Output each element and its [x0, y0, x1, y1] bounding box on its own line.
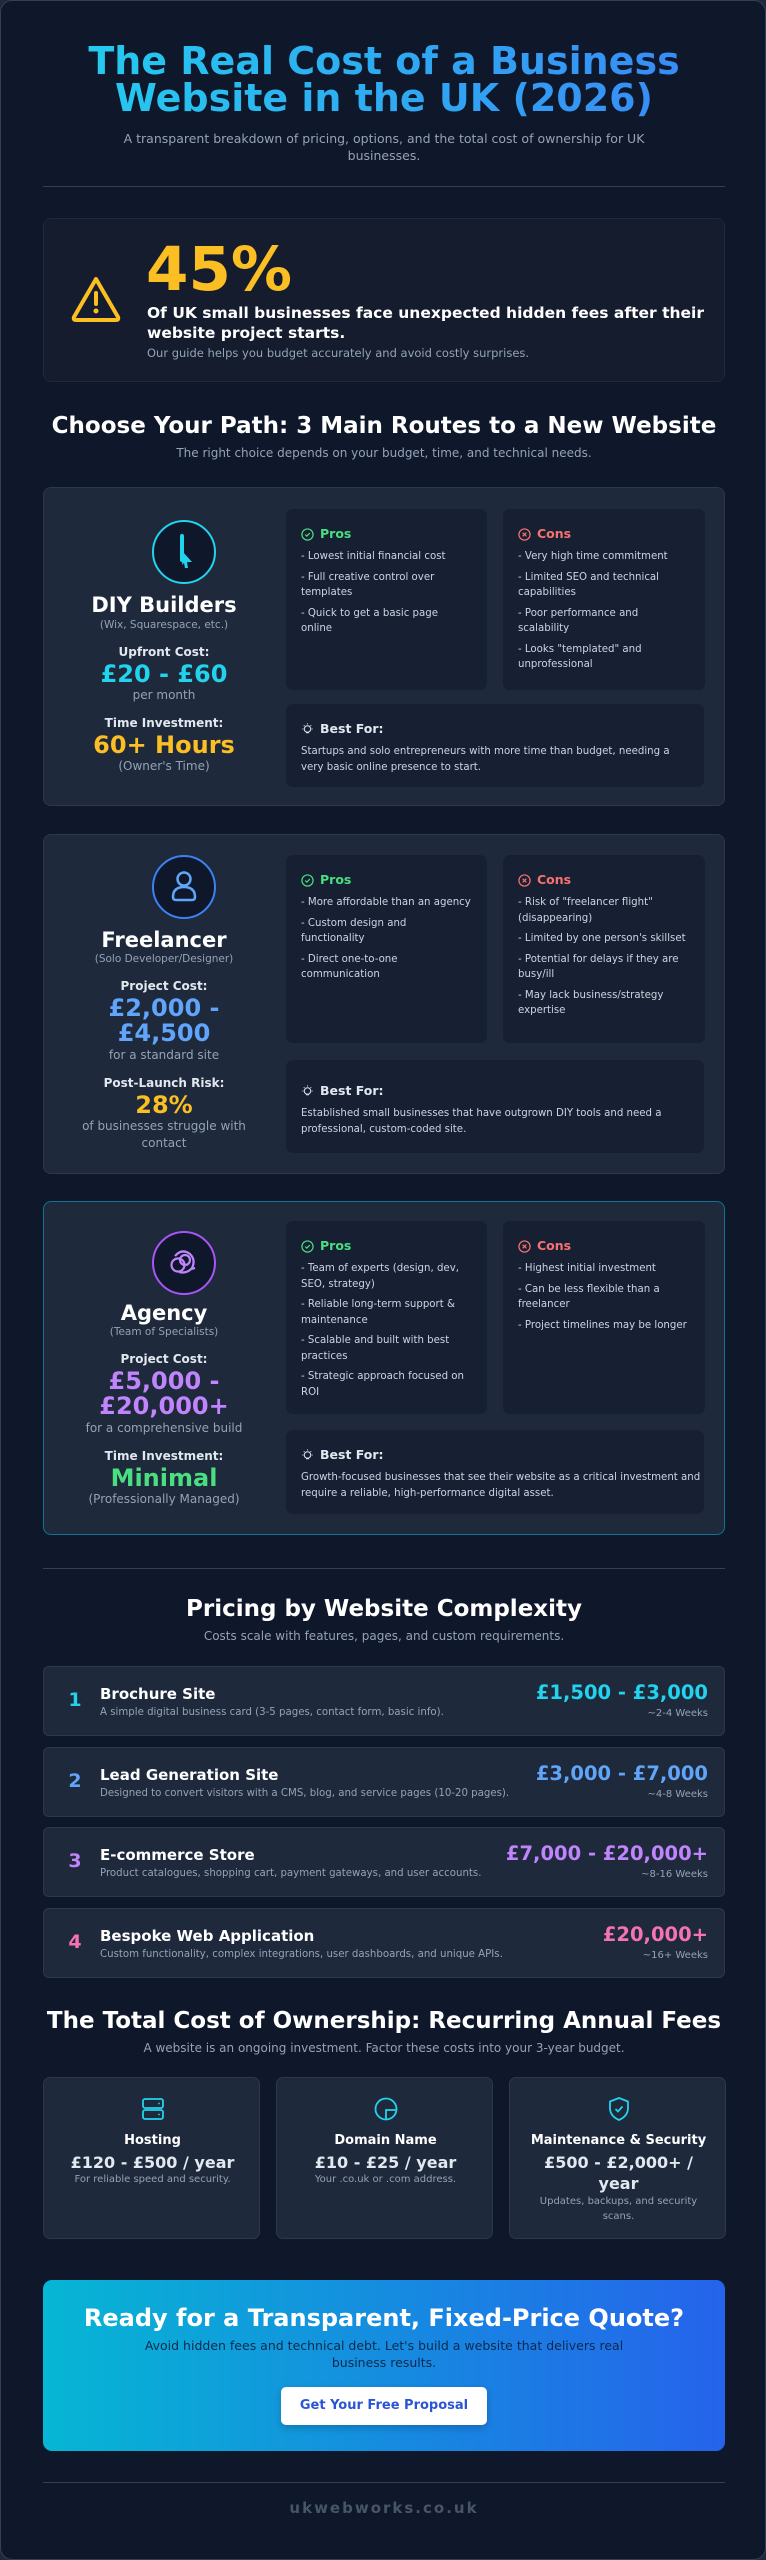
best for: Startups and solo entrepreneurs with more time than budget, needing a very basic online presence to start. — [301, 746, 670, 772]
best for: Best For: — [320, 1083, 384, 1098]
card: maintenance: £500 - £2,000+ / year — [544, 2153, 693, 2193]
cons: - Risk of "freelancer flight" (disappearing) — [518, 897, 653, 924]
agency summary column: Project Cost: — [121, 1352, 207, 1366]
best for: Best For: — [320, 1447, 384, 1462]
DIY summary column: DIY Builders — [91, 593, 237, 617]
subheading: Costs scale with features, pages, and custom requirements. — [204, 1629, 564, 1643]
pricing row 2: Designed to convert visitors with a CMS, blog, and service pages (10-20 pages). — [100, 1788, 509, 1799]
cons — [503, 855, 705, 1043]
icon: shield — [609, 2097, 629, 2121]
best for: Growth-focused businesses that see their website as a critical investment and require a reliable, high-performance digital asset. — [301, 1472, 700, 1498]
CTA banner — [43, 2280, 725, 2451]
card: domain: Domain Name — [334, 2133, 437, 2148]
pricing row 4 — [43, 1908, 725, 1978]
freelancer summary column: for a standard site — [109, 1048, 219, 1062]
card: hosting — [43, 2077, 260, 2239]
icon: user — [152, 855, 216, 919]
pricing row 2: ~4-8 Weeks — [648, 1789, 708, 1800]
pricing row 1: ~2-4 Weeks — [648, 1708, 708, 1719]
pricing row 3 — [43, 1827, 725, 1897]
pricing row 4: 4 — [68, 1931, 82, 1953]
card: hosting: Hosting — [124, 2133, 181, 2148]
pricing row 1: Brochure Site — [100, 1685, 215, 1703]
pricing row 2: Lead Generation Site — [100, 1766, 278, 1784]
DIY summary column: Time Investment: — [105, 716, 223, 730]
DIY summary column: Upfront Cost: — [119, 645, 209, 659]
freelancer summary column: of businesses struggle with contact — [82, 1119, 246, 1150]
best for: Best For: — [320, 721, 384, 736]
subheading: The right choice depends on your budget, time, and technical needs. — [176, 446, 592, 460]
freelancer summary column — [82, 855, 246, 1150]
pros: - Custom design and functionality — [301, 918, 406, 944]
card: hosting: For reliable speed and security. — [74, 2174, 231, 2185]
DIY summary column: (Wix, Squarespace, etc.) — [100, 619, 228, 631]
subheading: A website is an ongoing investment. Factor these costs into your 3-year budget. — [143, 2041, 625, 2055]
cons: Cons — [537, 526, 571, 541]
cons: - Project timelines may be longer — [518, 1320, 687, 1330]
card: maintenance: Maintenance & Security — [531, 2133, 706, 2148]
card: domain: Your .co.uk or .com address. — [315, 2174, 456, 2185]
card: maintenance: Updates, backups, and security scans. — [540, 2196, 697, 2222]
pricing row 4: £20,000+ — [603, 1923, 708, 1946]
CTA heading: Ready for a Transparent, Fixed-Price Quote? — [84, 2304, 684, 2332]
agency summary column: Minimal — [111, 1464, 217, 1492]
icon: agency team — [152, 1231, 216, 1295]
cons: Cons — [537, 872, 571, 887]
cons — [503, 509, 705, 690]
agency summary column: Agency — [121, 1301, 207, 1325]
big number: 45% — [146, 234, 292, 305]
pricing row 2: £3,000 - £7,000 — [536, 1762, 708, 1785]
best for: Established small businesses that have outgrown DIY tools and need a professional, custom-coded site. — [301, 1108, 661, 1134]
icon: warning triangle — [72, 276, 120, 322]
DIY summary column: (Owner's Time) — [118, 759, 210, 773]
pricing row 2 — [43, 1747, 725, 1817]
agency summary column: Time Investment: — [105, 1449, 223, 1463]
freelancer summary column: (Solo Developer/Designer) — [95, 953, 233, 965]
cons: - Limited by one person's skillset — [518, 933, 686, 944]
CTA button: Get Your Free Proposal — [300, 2398, 468, 2413]
pricing row 2: 2 — [68, 1770, 82, 1792]
title: The Real Cost of a Business — [88, 39, 680, 83]
stat text: Of UK small businesses face unexpected hidden fees after their website project starts. — [147, 304, 704, 342]
title — [1, 43, 766, 117]
cons: - Limited SEO and technical capabilities — [518, 572, 659, 598]
pros: - Reliable long-term support & maintenance — [301, 1299, 455, 1326]
pricing row 4: Bespoke Web Application — [100, 1927, 314, 1945]
title: Website in the UK (2026) — [115, 76, 653, 120]
pros: - Quick to get a basic page online — [301, 608, 438, 634]
pricing row 4: Custom functionality, complex integrations, user dashboards, and unique APIs. — [100, 1949, 503, 1960]
cons: Cons — [537, 1238, 571, 1253]
pros: Pros — [320, 872, 351, 887]
agency summary column: £5,000 - — [109, 1367, 219, 1395]
stat callout: 45% — [43, 218, 725, 382]
pricing row 3: ~8-16 Weeks — [641, 1869, 708, 1880]
agency summary column: £20,000+ — [99, 1392, 229, 1420]
CTA text: Avoid hidden fees and technical debt. Let's build a website that delivers real business results. — [145, 2338, 623, 2370]
pros — [286, 509, 487, 690]
icon: domain — [374, 2098, 398, 2120]
freelancer summary column: 28% — [135, 1091, 193, 1119]
footer: ukwebworks.co.uk — [289, 2499, 479, 2517]
pros: - Direct one-to-one communication — [301, 954, 398, 980]
best for — [286, 704, 704, 787]
stat note: Our guide helps you budget accurately and avoid costly surprises. — [147, 346, 529, 360]
panel: agency — [43, 1201, 725, 1535]
freelancer summary column: Post-Launch Risk: — [104, 1076, 224, 1090]
cons: - Can be less flexible than a freelancer — [518, 1284, 660, 1310]
agency summary column — [86, 1231, 242, 1506]
panel: DIY builders — [43, 487, 725, 806]
cons: - Very high time commitment — [518, 551, 668, 562]
DIY summary column: 60+ Hours — [93, 731, 235, 759]
heading: total cost of ownership: The Total Cost of Ownership: Recurring Annual Fees — [47, 2008, 721, 2034]
icon: cursor — [152, 520, 216, 584]
pros: - Team of experts (design, dev, SEO, strategy) — [301, 1263, 459, 1290]
panel: freelancer — [43, 834, 725, 1174]
pricing row 3: £7,000 - £20,000+ — [506, 1842, 708, 1865]
best for — [286, 1430, 704, 1514]
pricing row 3: E-commerce Store — [100, 1846, 255, 1864]
freelancer summary column: Project Cost: — [121, 979, 207, 993]
pricing row 3: Product catalogues, shopping cart, payment gateways, and user accounts. — [100, 1868, 481, 1879]
pricing row 1 — [43, 1666, 725, 1736]
agency summary column: for a comprehensive build — [86, 1421, 242, 1435]
CTA button — [281, 2387, 487, 2425]
pricing row 3: 3 — [68, 1850, 82, 1872]
pros: - Strategic approach focused on ROI — [301, 1371, 464, 1398]
cons: - Looks "templated" and unprofessional — [518, 644, 642, 670]
cons — [503, 1221, 705, 1414]
pricing row 1: £1,500 - £3,000 — [536, 1681, 708, 1704]
agency summary column: (Professionally Managed) — [88, 1492, 240, 1506]
card: maintenance — [509, 2077, 726, 2239]
pricing row 1: 1 — [68, 1689, 82, 1711]
DIY summary column: £20 - £60 — [101, 660, 227, 688]
agency summary column: (Team of Specialists) — [110, 1326, 218, 1338]
card: hosting: £120 - £500 / year — [71, 2153, 234, 2172]
icon: server — [142, 2098, 164, 2120]
cons: - Poor performance and scalability — [518, 608, 638, 634]
pros: Pros — [320, 526, 351, 541]
cons: - Highest initial investment — [518, 1263, 656, 1274]
pros — [286, 855, 487, 1043]
cons: - Potential for delays if they are busy/ill — [518, 954, 679, 980]
pricing row 4: ~16+ Weeks — [643, 1950, 708, 1961]
pros: - Scalable and built with best practices — [301, 1335, 449, 1362]
pricing row 1: A simple digital business card (3-5 pages, contact form, basic info). — [100, 1707, 444, 1718]
DIY summary column — [91, 520, 237, 773]
pros: - More affordable than an agency — [301, 897, 471, 908]
cons: - May lack business/strategy expertise — [518, 990, 663, 1016]
best for — [286, 1060, 704, 1153]
DIY summary column: per month — [133, 688, 195, 702]
pros: - Lowest initial financial cost — [301, 551, 446, 562]
freelancer summary column: £4,500 — [118, 1019, 210, 1047]
card: domain — [276, 2077, 493, 2239]
pros — [286, 1221, 487, 1414]
heading: pricing by complexity: Pricing by Website Complexity — [186, 1596, 582, 1622]
card: domain: £10 - £25 / year — [315, 2153, 456, 2172]
heading: choose your path: Choose Your Path: 3 Main Routes to a New Website — [52, 413, 716, 439]
pros: Pros — [320, 1238, 351, 1253]
freelancer summary column: £2,000 - — [109, 994, 219, 1022]
freelancer summary column: Freelancer — [101, 928, 227, 952]
subtitle: A transparent breakdown of pricing, options, and the total cost of ownership for UK businesses. — [124, 131, 644, 163]
pros: - Full creative control over templates — [301, 572, 434, 598]
